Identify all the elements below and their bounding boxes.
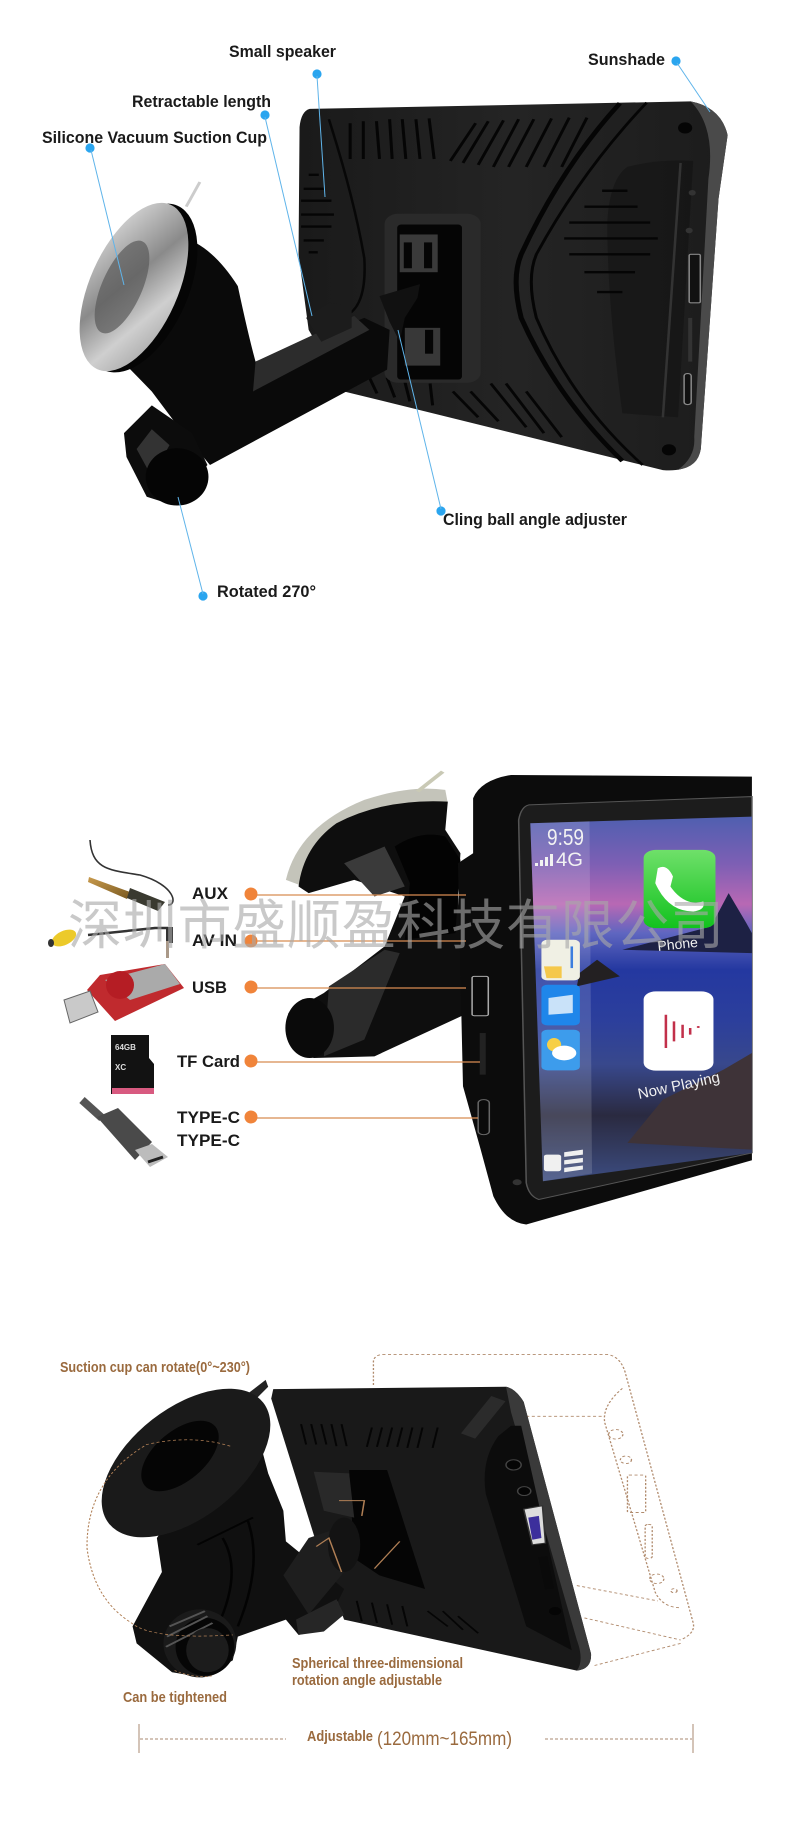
screen status text: [535, 824, 721, 1103]
callout: Cling ball angle adjuster: [398, 330, 627, 529]
panel: device rear view with callouts: [42, 42, 728, 601]
callout: Silicone Vacuum Suction Cup: [42, 128, 267, 285]
callout: Silicone Vacuum Suction Cup: Silicone Vacuum Suction Cup: [42, 128, 267, 147]
vents: [301, 1424, 478, 1633]
dimension: adjustable range: (120mm~165mm): [377, 1729, 512, 1750]
callout: Sunshade: Sunshade: [588, 50, 665, 69]
ports on side: [472, 976, 488, 1016]
callout: TF Card: [177, 1052, 480, 1071]
callout: TYPE-C: [177, 1108, 478, 1150]
label: spherical rotation: rotation angle adjustable: [292, 1672, 442, 1689]
dock icons: [544, 1155, 561, 1171]
ports: [506, 1460, 521, 1470]
dimension: adjustable range: Adjustable: [307, 1728, 373, 1745]
device rear tilted: [271, 1387, 591, 1671]
callout: Rotated 270°: Rotated 270°: [217, 582, 316, 601]
screen status text: Now Playing: [636, 1069, 721, 1103]
mount plate: [349, 1470, 425, 1589]
label: suction cup rotation: Suction cup can rotate(0°~230°): [60, 1359, 250, 1376]
dimension: adjustable range: [139, 1724, 693, 1753]
panel: ports and accessories: [48, 772, 752, 1224]
callout: TYPE-C: TYPE-C: [177, 1131, 240, 1150]
mount plate: [385, 214, 481, 383]
screen status text: Phone: [657, 934, 699, 954]
app icon: weather: [541, 1030, 580, 1070]
screen wallpaper: [530, 817, 752, 1181]
watermark: 深圳市盛顺盈科技有限公司: [68, 896, 724, 956]
screen status text: 9:59: [547, 824, 584, 850]
callout: AV IN: AV IN: [192, 931, 237, 950]
suction mount side view: [285, 772, 468, 1058]
callout: AUX: AUX: [192, 884, 229, 903]
screen status text: 4G: [556, 850, 583, 871]
rotation arrows and dashed arc: [87, 1440, 400, 1677]
callout: Small speaker: [229, 42, 336, 197]
accessory: USB-C cable: [82, 1100, 168, 1167]
accessory: AV IN cable: [48, 926, 173, 958]
rear vents: [301, 118, 658, 437]
accessory: USB drive: [64, 964, 184, 1023]
callout: Retractable length: Retractable length: [132, 92, 271, 111]
callout: TF Card: TF Card: [177, 1052, 240, 1071]
callout: USB: USB: [192, 978, 227, 997]
callout: AV IN: [192, 931, 466, 950]
ghost outline of tilted device: [373, 1354, 694, 1666]
label: can be tightened: Can be tightened: [123, 1689, 227, 1706]
callout: Rotated 270°: [178, 497, 316, 601]
ports: [684, 190, 700, 405]
app icon: mail: [541, 985, 580, 1025]
accessory: TF card: XC: [115, 1063, 126, 1072]
callout: USB: [192, 978, 466, 997]
device rear body: [299, 101, 728, 470]
suction mount with arm: [57, 182, 420, 505]
app icon: maps: [541, 940, 580, 980]
callout: Cling ball angle adjuster: Cling ball angle adjuster: [443, 510, 627, 529]
callout: Retractable length: [132, 92, 312, 316]
suction mount tilted: [75, 1359, 360, 1677]
panel: adjustment diagram: [60, 1354, 694, 1753]
callout: Sunshade: [588, 50, 710, 112]
app icon: now playing: [644, 991, 713, 1071]
label: spherical rotation: [292, 1655, 463, 1689]
callout: AUX: [192, 884, 466, 903]
app icon: phone: [644, 850, 715, 928]
callout: Small speaker: Small speaker: [229, 42, 336, 61]
label: spherical rotation: Spherical three-dimensional: [292, 1655, 463, 1672]
accessory: AUX cable: [88, 840, 173, 911]
device front with screen: [458, 775, 752, 1224]
callout: TYPE-C: TYPE-C: [177, 1108, 240, 1127]
accessory: TF card: [111, 1035, 154, 1094]
accessory: TF card: 64GB: [115, 1043, 136, 1052]
